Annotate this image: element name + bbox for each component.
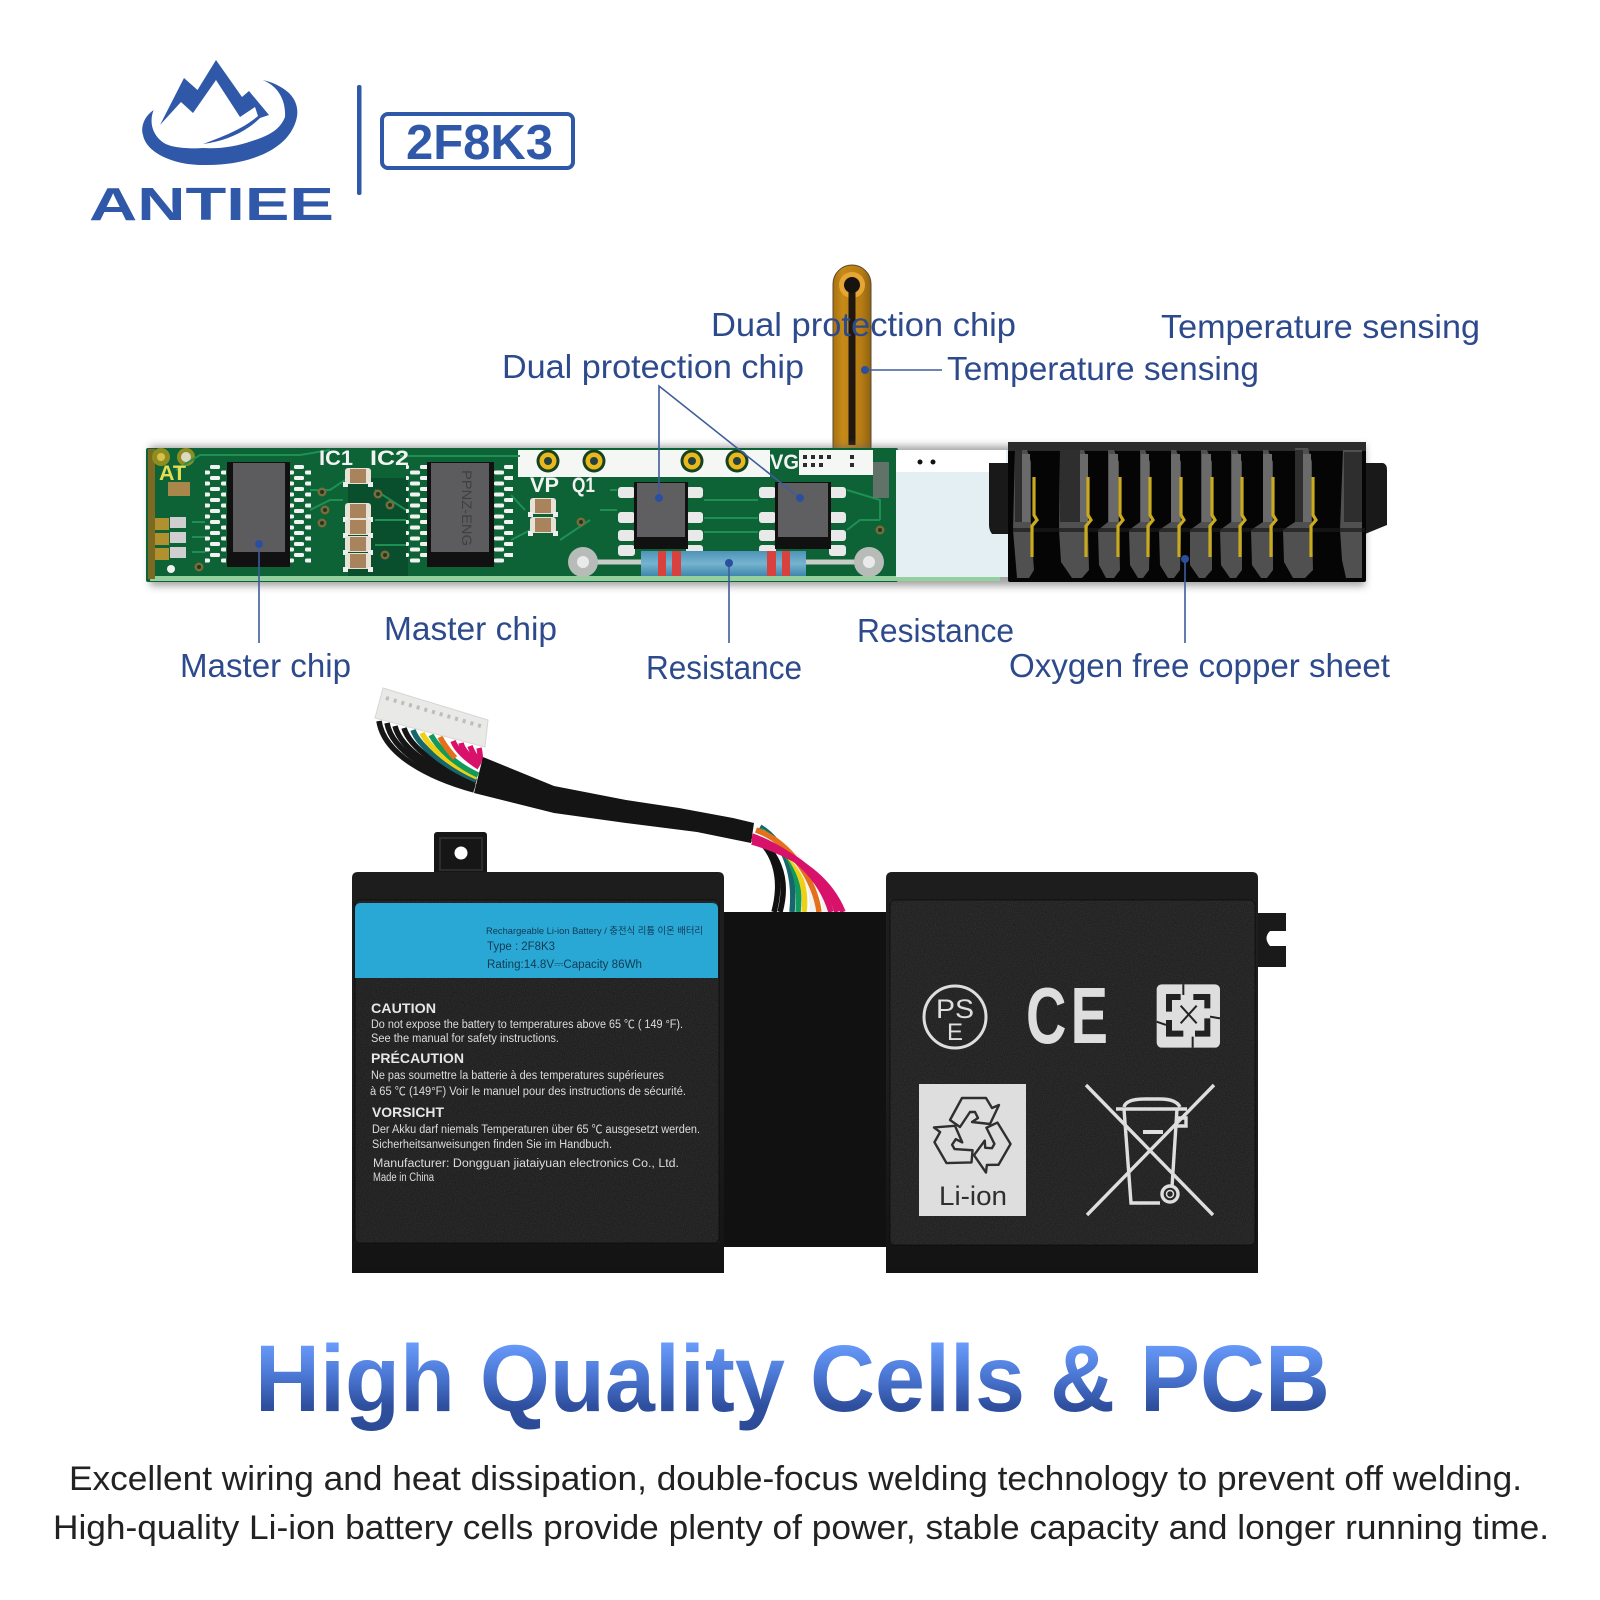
callout: temperature sensing with leader line: Temperature sensing: [947, 350, 1259, 387]
wordmark: ANTIEE: ANTIEE: [89, 178, 334, 230]
board drop shadow: [150, 446, 1365, 586]
silkscreen labels: IC1: [319, 447, 353, 470]
green circuit board: [146, 448, 898, 582]
silkscreen labels: VG: [770, 451, 799, 474]
left cell: [352, 872, 724, 1273]
small SMD components: [343, 468, 558, 572]
callout: resistance with leader line: Resistance: [646, 649, 802, 686]
mounting tab: [434, 832, 487, 876]
white board printing band: [518, 450, 873, 477]
connector fins: [1013, 448, 1362, 578]
connector top rail: [1008, 442, 1366, 451]
icon: PSE mark: E: [947, 1019, 963, 1046]
icon: mountain peaks: [160, 60, 269, 144]
callout: resistance with leader line: [646, 559, 802, 686]
centre connecting strip: [720, 912, 890, 1247]
solder holes: [536, 450, 748, 472]
description text: Excellent wiring and heat dissipation, double-focus welding technology to prevent off welding.: [69, 1460, 1522, 1498]
silkscreen labels: AT: [159, 462, 186, 485]
silkscreen labels: IC2: [370, 447, 409, 470]
icon: recycling arrows square: [1157, 984, 1220, 1048]
darker board area: [348, 478, 408, 576]
safety warning text: à 65 ℃ (149°F) Voir le manuel pour des instructions de sécurité.: [370, 1086, 686, 1098]
safety warning text: VORSICHT: [372, 1104, 444, 1120]
small component on right of board: [873, 462, 889, 498]
model badge: 2F8K3: 2F8K3: [406, 116, 553, 170]
callout: master chip with leader line: Master chip: [180, 647, 351, 684]
silkscreen labels: Q1: [572, 474, 595, 497]
safety warning text: Manufacturer: Dongguan jiataiyuan electronics Co., Ltd.: [373, 1158, 679, 1170]
temperature sensor flex strip: [833, 265, 871, 450]
PCB protection board: [146, 442, 1387, 586]
icon: PSE mark: [924, 986, 986, 1048]
korean and english rating text: Rating:14.8V⎓Capacity 86Wh: [487, 959, 642, 971]
side clip: [1258, 913, 1286, 967]
safety warning text: PRÉCAUTION: [371, 1050, 464, 1066]
icon: CE mark: CE: [1026, 970, 1112, 1060]
safety warning text: Ne pas soumettre la batterie à des temperatures supérieures: [371, 1070, 664, 1082]
safety warning text: Made in China: [373, 1172, 434, 1184]
icon: crossed out wheelie bin: [1086, 1085, 1214, 1215]
callout: oxygen free copper sheet with leader line: Oxygen free copper sheet: [1009, 647, 1390, 684]
icon: Li-ion recycling box: [919, 1084, 1026, 1216]
silkscreen labels: VP: [530, 474, 559, 497]
safety warning text: Do not expose the battery to temperatures above 65 ℃ ( 149 °F).: [371, 1019, 683, 1031]
description text: [53, 1460, 1549, 1547]
description text: High-quality Li-ion battery cells provide plenty of power, stable capacity and longer running time.: [53, 1509, 1549, 1547]
battery connector body: [1008, 442, 1366, 582]
chip pins for master chips: [205, 465, 513, 564]
heading: High Quality Cells & PCB: High Quality Cells & PCB: [255, 1326, 1330, 1432]
divider between logo and model badge: [357, 85, 362, 195]
plug wires: [379, 721, 481, 790]
blue label: [355, 903, 718, 978]
safety warning text: See the manual for safety instructions.: [371, 1033, 559, 1045]
dotted pads on white band: [803, 455, 854, 467]
white plug: [375, 688, 488, 747]
silkscreen labels: [159, 447, 799, 497]
fin shaded sides: [1015, 450, 1362, 522]
korean and english rating text: Type : 2F8K3: [487, 941, 555, 953]
safety warning text: Sicherheitsanweisungen finden Sie im Handbuch.: [372, 1139, 612, 1151]
second master chip: [427, 462, 494, 567]
logo: ANTIEE mountain and wordmark: [89, 60, 334, 230]
vias: [194, 488, 884, 572]
gold copper contact sheets: [1032, 477, 1316, 557]
safety warning text: [370, 1000, 700, 1184]
dual protection chip left: [618, 482, 703, 556]
connector side ears: [989, 463, 1387, 534]
right cell: [886, 872, 1286, 1273]
fin waistband: [1013, 528, 1365, 532]
callout: dual protection chip upper label: Dual protection chip: [711, 306, 1016, 343]
gold edge contacts: [148, 448, 195, 579]
dual protection chip right: [759, 482, 846, 556]
korean and english rating text: [486, 926, 703, 971]
callout: oxygen free copper sheet with leader line: [1009, 555, 1390, 684]
korean and english rating text: Rechargeable Li-ion Battery / 충전식 리튬 이온 배터리: [486, 926, 703, 937]
battery cable and plug: [375, 688, 843, 912]
battery pack: [352, 832, 1286, 1273]
master chip: [227, 462, 290, 567]
resistor with leads: [568, 547, 884, 577]
callout: dual protection chip with leader lines: Dual protection chip: [502, 348, 804, 385]
black cable sleeve: [474, 757, 754, 843]
board bottom edge: [150, 576, 1000, 581]
fin highlights: [1022, 454, 1311, 522]
callout: master chip second label: Master chip: [384, 610, 557, 647]
callout: dual protection chip with leader lines: [502, 348, 804, 502]
callout: temperature sensing upper label: Temperature sensing: [1161, 308, 1480, 345]
white blank board end: [896, 450, 1014, 577]
icon: PSE mark: PS: [936, 994, 974, 1024]
callout: resistance second label: Resistance: [857, 612, 1014, 649]
icon: Li-ion recycling box: Li-ion: [939, 1181, 1007, 1211]
icon: outer swoosh: [142, 80, 297, 165]
copper traces: [176, 450, 880, 552]
lower wire bundle: [752, 827, 843, 912]
safety warning text: CAUTION: [371, 1000, 436, 1016]
callout: master chip with leader line: [180, 540, 351, 684]
second master chip: PPNZ-ENG: [459, 470, 475, 546]
safety warning text: Der Akku darf niemals Temperaturen über 65 ℃ ausgesetzt werden.: [372, 1124, 700, 1136]
